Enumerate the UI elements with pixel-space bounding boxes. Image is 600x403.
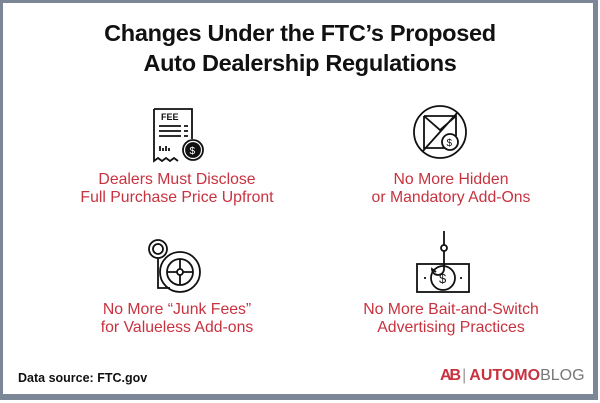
icon: tire gauge (148, 239, 201, 293)
caption 2: No More Hidden (393, 171, 509, 188)
caption 3: No More “Junk Fees” (103, 301, 251, 318)
caption 3 (100, 301, 253, 336)
caption 4: Advertising Practices (377, 319, 525, 336)
icon: fee receipt (153, 108, 204, 163)
caption 3: for Valueless Add-ons (101, 319, 253, 336)
caption 2 (372, 171, 530, 206)
icon: bait hook money: $ (439, 271, 447, 286)
icon: no hidden addons (413, 105, 467, 159)
caption 1: Full Purchase Price Upfront (80, 189, 274, 206)
caption 1 (80, 171, 274, 206)
icon: fee receipt: $ (190, 146, 196, 157)
icon: bait hook money (416, 231, 470, 293)
caption 4: No More Bait-and-Switch (363, 301, 539, 318)
title (104, 20, 496, 76)
caption 4 (363, 301, 539, 336)
logo: AB|AUTOMOBLOG (440, 367, 585, 384)
caption 1: Dealers Must Disclose (98, 171, 256, 188)
caption 2: or Mandatory Add-Ons (372, 189, 530, 206)
title: Changes Under the FTC’s Proposed (104, 20, 496, 46)
data source: Data source: FTC.gov (18, 371, 147, 385)
icon: no hidden addons: $ (446, 138, 452, 149)
icon: fee receipt: FEE (161, 112, 179, 122)
title: Auto Dealership Regulations (143, 50, 457, 76)
